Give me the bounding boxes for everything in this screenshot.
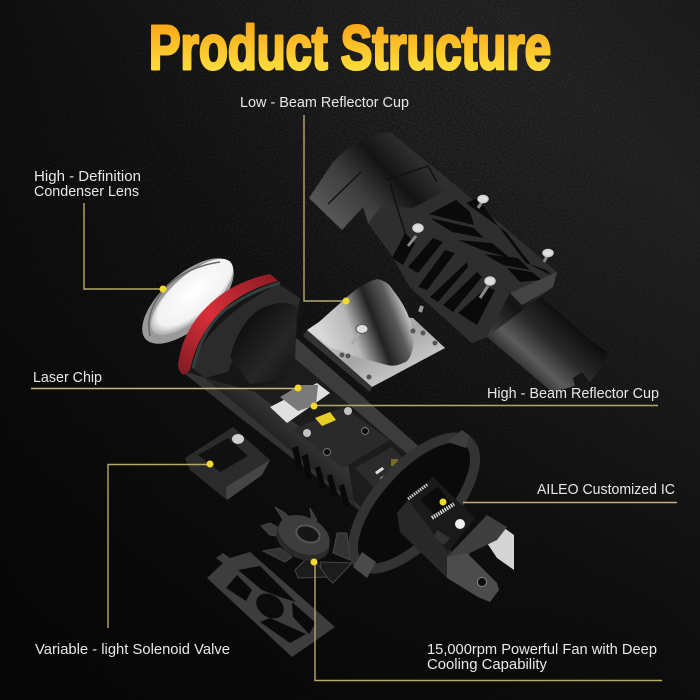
high-beam reflector [270, 383, 330, 423]
title: Product Structure [149, 14, 551, 83]
fan blades [261, 507, 352, 583]
plug tab [447, 553, 499, 602]
optics housing cylinder [184, 275, 302, 390]
rear neck [397, 500, 452, 578]
plug ring [447, 515, 507, 557]
callout: condenser lens [34, 169, 166, 292]
callout: fan: 15,000rpm Powerful Fan with Deep [427, 642, 657, 658]
callout: condenser lens: High - Definition [34, 169, 141, 185]
callout: laser chip [31, 370, 302, 392]
top fin block [413, 187, 557, 293]
callout: low-beam reflector cup: Low - Beam Reflector Cup [240, 95, 409, 111]
body shell [180, 335, 440, 520]
fan hub [270, 511, 336, 569]
body end lip [510, 272, 557, 305]
callout: high-beam reflector cup: High - Beam Reflector Cup [487, 386, 659, 402]
callout: AILEO IC [440, 482, 677, 506]
condenser lens [128, 244, 248, 358]
red ring [178, 274, 278, 375]
gasket plate [207, 552, 335, 657]
callout: low-beam reflector cup [240, 95, 409, 304]
cup screw [352, 330, 361, 344]
plate holes [340, 328, 438, 380]
tube [487, 293, 607, 392]
inner bowl [230, 303, 297, 384]
solenoid bracket [185, 427, 270, 500]
callout: fan [310, 558, 662, 680]
callout: laser chip: Laser Chip [33, 370, 102, 386]
low-beam reflector cup [303, 279, 445, 392]
callout: solenoid valve [35, 460, 230, 658]
yellow LED chip [315, 412, 336, 426]
callout: AILEO IC: AILEO Customized IC [537, 482, 675, 498]
reflector dome [310, 279, 414, 366]
rear mounting collar ring [332, 418, 496, 588]
housing barrel [309, 132, 557, 343]
circuit board floor [293, 407, 390, 468]
lower side face [368, 206, 510, 343]
main lamp body [178, 274, 514, 602]
screws [408, 196, 553, 312]
cooling fan [261, 507, 352, 583]
collar foot [353, 552, 376, 578]
board screws [303, 407, 352, 437]
barrel grooves [328, 166, 437, 236]
callout: fan: Cooling Capability [427, 657, 548, 673]
callout: solenoid valve: Variable - light Solenoid Valve [35, 642, 230, 658]
IC chip details [408, 484, 465, 545]
callout: high-beam reflector cup [310, 386, 659, 410]
IC board [408, 477, 475, 552]
lower wall [180, 370, 368, 516]
small PCB [355, 447, 412, 492]
inner green-grey ring [193, 283, 280, 368]
low-beam housing with heat-sink fins [309, 132, 607, 392]
metal terminal [483, 525, 514, 570]
mounting plate [307, 310, 445, 387]
side fin slots [392, 233, 495, 325]
side slots [292, 446, 350, 508]
upper rail [285, 335, 423, 458]
callout: condenser lens: Condenser Lens [34, 184, 139, 200]
